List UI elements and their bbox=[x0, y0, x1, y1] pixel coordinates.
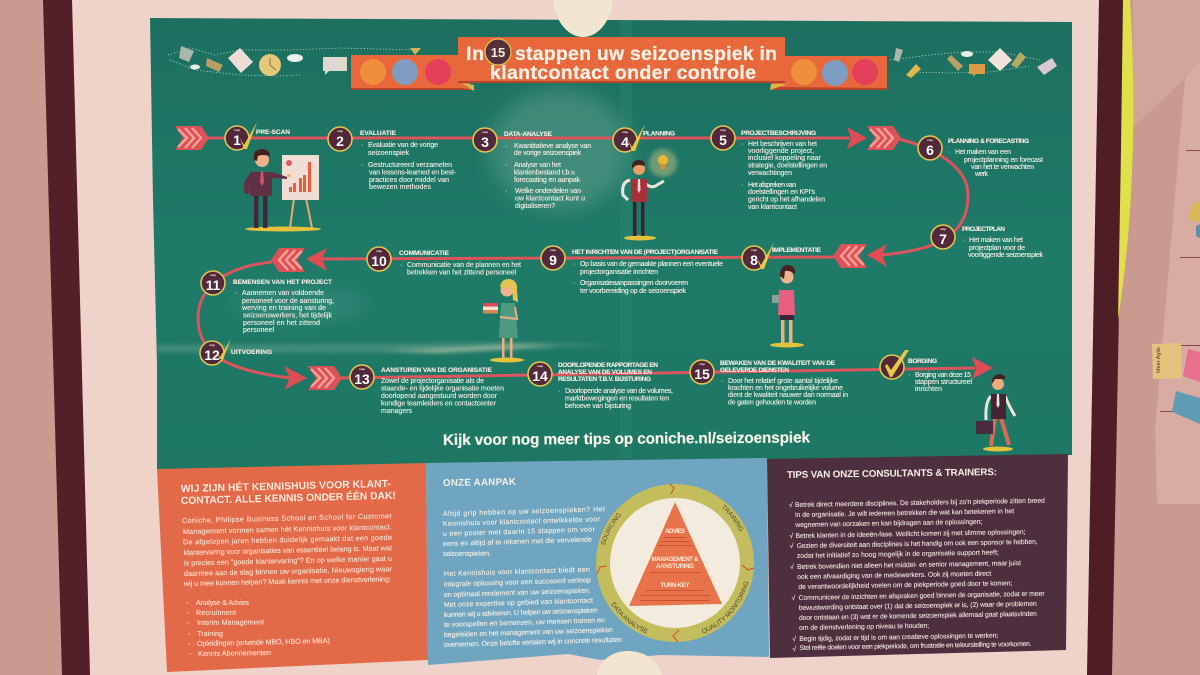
step 9: ter voorbereiding op de seizoenspiek bbox=[580, 288, 686, 295]
panel: orange kennishuis: Interim Management bbox=[197, 617, 264, 627]
panel: blue onze aanpak: Het Kennishuis voor klantcontact biedt een bbox=[444, 567, 590, 578]
step 2: · bbox=[361, 142, 363, 149]
title banner: 15 bbox=[491, 45, 505, 60]
diagram: ring with pyramid: DATA ANALYSE bbox=[611, 602, 648, 634]
step 13: Zowel de projectorganisatie als de bbox=[381, 378, 484, 385]
illustration: blonde woman with books bbox=[483, 279, 524, 362]
step 2: practices door middel van bbox=[369, 177, 449, 184]
panel: orange kennishuis: WIJ ZIJN HÉT KENNISHUIS VOOR KLANT- bbox=[181, 477, 392, 495]
illustration: man walking with briefcase bbox=[976, 374, 1015, 452]
step 10: · bbox=[400, 262, 402, 269]
step 12: 12 bbox=[204, 347, 220, 363]
step 15: BEWAKEN VAN DE KWALITEIT VAN DE bbox=[720, 360, 836, 367]
panel: orange kennishuis: Opleidingen (erkende MBO, HBO en MBA) bbox=[197, 636, 330, 648]
step: borging: Borging van deze 15 bbox=[915, 372, 971, 379]
step 13: stap bbox=[359, 367, 365, 371]
step 15: dient de kwaliteit nauwer dan normaal in bbox=[728, 392, 848, 399]
step 11: personeel bbox=[243, 327, 274, 334]
step 4: PLANNING bbox=[643, 130, 675, 138]
step 5: PROJECTBESCHRIJVING bbox=[741, 130, 816, 137]
panel: orange kennishuis bbox=[157, 463, 428, 672]
step 15: krachten en het ongebruikelijke volume bbox=[728, 385, 843, 392]
panel: orange kennishuis: - bbox=[187, 608, 190, 617]
step 13: 13 bbox=[354, 371, 370, 387]
step 11: personeel voor de aansturing, bbox=[242, 298, 334, 305]
panel: orange kennishuis: Coniche, Philipse Business School en School for Customer bbox=[182, 511, 393, 525]
step 14: behoeve van bijsturing bbox=[565, 403, 631, 410]
step 5: verwachtingen bbox=[748, 170, 792, 177]
diagram: ring with pyramid bbox=[596, 482, 754, 642]
panel: orange kennishuis: Recruitment bbox=[196, 608, 236, 617]
title banner: In bbox=[466, 43, 484, 65]
title banner: stappen uw seizoenspiek in bbox=[515, 43, 777, 65]
panel: blue onze aanpak: seizoenspieken. bbox=[443, 551, 491, 558]
step 15: Door het relatief grote aantal tijdelijke bbox=[728, 378, 838, 385]
panel: blue onze aanpak: u een poster met daarin 15 stappen om voor bbox=[443, 526, 596, 538]
step 6: werk bbox=[974, 171, 988, 178]
step 3: DATA-ANALYSE bbox=[504, 131, 553, 138]
panel: blue onze aanpak: en optimaal rendement van uw seizoenspieken. bbox=[444, 588, 591, 599]
step 5: stap bbox=[720, 128, 726, 132]
step 12: UITVOERING bbox=[231, 349, 272, 356]
step: borging bbox=[880, 350, 972, 393]
sticky note: yellow bbox=[1152, 343, 1182, 379]
panel: blue onze aanpak: Kennishuis voor klantcontact ontwikkelde voor bbox=[443, 516, 601, 528]
frame: right bar bbox=[1087, 0, 1125, 675]
step 6: van het te verwachten bbox=[971, 164, 1034, 171]
step 13: doorlopend aangestuurd worden door bbox=[381, 393, 498, 400]
illustration: man with light bulb bbox=[623, 149, 677, 240]
step 10: betrekken van het zittend personeel bbox=[407, 270, 516, 276]
step 7: · bbox=[962, 237, 964, 244]
process path: line row 3 bbox=[284, 357, 993, 390]
panel: purple tips: Begin tijdig, zodat er tijd is om aan creatieve oplossingen te werken; bbox=[799, 632, 998, 643]
title banner bbox=[458, 37, 785, 84]
panel: orange kennishuis: Management vormen samen hét Kennishuis voor klantcontact. bbox=[183, 522, 392, 536]
panel: orange kennishuis: - bbox=[188, 639, 191, 648]
step 7: stap bbox=[940, 227, 946, 231]
step 2: 2 bbox=[336, 133, 344, 149]
panel: orange kennishuis: is precies een “goede klantervaring”? En op welke manier gaat u bbox=[184, 554, 392, 567]
magnet bottom bbox=[597, 651, 662, 675]
step 9: projectorganisatie inrichten bbox=[580, 269, 658, 276]
panel: purple tips: √ bbox=[789, 532, 794, 540]
step 13: kundige teamleiders en contactcenter bbox=[381, 400, 497, 408]
step 11: Aannemen van voldoende bbox=[242, 290, 324, 297]
magnet top bbox=[553, 0, 613, 37]
panel: purple tips: in de organisatie. Je wilt iedereen betrekken die wat kan betekenen in het bbox=[795, 508, 1014, 519]
step 9: Organisatieaanpassingen doorvoeren bbox=[580, 280, 688, 287]
panel: blue onze aanpak bbox=[426, 458, 769, 665]
process path: right curve bbox=[882, 139, 968, 255]
step 14 bbox=[528, 362, 673, 410]
illustration: woman with tablet bbox=[770, 265, 804, 348]
step 3: · bbox=[505, 143, 507, 150]
panel: orange kennishuis: wij u mee kunnen helpen? Maak kennis met onze dienstverlening: bbox=[183, 574, 391, 588]
step 2: seizoenspiek bbox=[368, 150, 410, 157]
step 15: de gaten gehouden te worden bbox=[728, 400, 816, 406]
panel: blue onze aanpak: integrale oplossing voor een succesvol verloop bbox=[444, 577, 591, 588]
process path: line row 1 bbox=[175, 126, 901, 150]
step 9: · bbox=[573, 261, 575, 268]
step 3: forecasting en aanpak bbox=[514, 177, 580, 184]
step 6: projectplanning en forecast bbox=[964, 157, 1043, 164]
panel: purple tips: Stel reële doelen voor een piekperiode, om frustratie en teleurstelling te voorkomen. bbox=[799, 641, 1032, 652]
step 9: HET INRICHTEN VAN DE (PROJECT)ORGANISATIE bbox=[572, 249, 719, 256]
step 14: stap bbox=[537, 364, 543, 368]
step 2: · bbox=[361, 162, 363, 169]
step 15 bbox=[690, 360, 848, 406]
panel: purple tips: zodat het initiatief zo hoog mogelijk in de organisatie support heeft; bbox=[797, 549, 999, 560]
frame: left bar bbox=[43, 0, 90, 675]
step 9: stap bbox=[550, 248, 556, 252]
step 2: EVALUATIE bbox=[360, 130, 397, 137]
panel: purple tips: √ bbox=[789, 501, 793, 509]
step 3 bbox=[473, 128, 591, 210]
panel: blue onze aanpak: eens en altijd af te rekenen met die vervelende bbox=[443, 537, 592, 548]
panel: purple tips: √ bbox=[792, 635, 796, 643]
step 8 bbox=[742, 242, 822, 270]
step 9 bbox=[541, 246, 723, 295]
step 4: 4 bbox=[621, 134, 629, 150]
step 14: marktbewegingen en resultaten ten bbox=[565, 396, 669, 402]
panel: purple tips: √ bbox=[790, 563, 794, 571]
panel: purple tips: bewustwording ontstaat over (1) dat de seizoenspiek er is, (2) waar de problemen bbox=[799, 601, 1037, 612]
step 10: 10 bbox=[371, 253, 387, 269]
step 5: · bbox=[741, 182, 743, 189]
decorative top icons: left cluster bbox=[168, 46, 421, 76]
step 11 bbox=[201, 271, 334, 334]
process path: left curve bbox=[198, 262, 290, 378]
right wall with paper and sticky notes bbox=[1133, 0, 1200, 504]
panel: purple tips: Betrek direct meerdere disciplines. De stakeholders bij zo'n piekperiode zitten breed bbox=[795, 498, 1045, 509]
step 2: stap bbox=[337, 129, 343, 133]
step 10: COMMUNICATIE bbox=[399, 250, 450, 257]
step 13: AANSTUREN VAN DE ORGANISATIE bbox=[381, 367, 493, 374]
step 9: Op basis van de gemaakte plannen een eventuele bbox=[580, 261, 723, 268]
step 15: 15 bbox=[694, 366, 710, 382]
step 10 bbox=[367, 247, 521, 276]
step 12 bbox=[200, 339, 272, 365]
panel: orange kennishuis: De afgelopen jaren hebben duidelijk gemaakt dat een goede bbox=[183, 533, 392, 546]
step 15: · bbox=[721, 378, 723, 385]
process path: line row 2 bbox=[271, 244, 887, 272]
step 11: 11 bbox=[206, 277, 221, 293]
step 3: Kwantitatieve analyse van bbox=[514, 143, 591, 150]
step 7: Het maken van het bbox=[969, 237, 1023, 244]
step 7: PROJECTPLAN bbox=[962, 226, 1005, 233]
panel: blue onze aanpak: te voorspellen en bemensen, uw mensen trainen en bbox=[444, 617, 605, 629]
panel: orange kennishuis: daarmee aan de slag binnen uw organisatie. Nieuwsgierig waar bbox=[184, 564, 393, 578]
step 2: Evaluatie van de vorige bbox=[368, 142, 438, 149]
step 5: voorliggende project, bbox=[748, 148, 814, 155]
step 5: 5 bbox=[719, 132, 727, 148]
step 14: DOORLOPENDE RAPPORTAGE EN bbox=[558, 362, 658, 369]
panel: green poster background bbox=[150, 18, 1072, 470]
diagram: ring with pyramid: SOURCING bbox=[601, 513, 620, 546]
step 6: · bbox=[948, 149, 950, 156]
panel: purple tips: ook een afvaardiging van de medewerkers. Ook zij moeten direct bbox=[797, 571, 991, 581]
illustration: man presenting at flipchart bbox=[244, 149, 321, 232]
step 3: digitaliseren? bbox=[515, 203, 555, 210]
step 5: inclusief koppeling naar bbox=[748, 155, 822, 162]
yellow folder edge bbox=[1118, 0, 1133, 320]
step 3: · bbox=[505, 162, 507, 169]
step 5: Het beschrijven van het bbox=[748, 141, 817, 148]
step 3: Welke onderdelen van bbox=[515, 188, 581, 195]
panel: purple tips: wegnemen van oorzaken en kan bijdragen aan de oplossingen; bbox=[794, 519, 982, 529]
step 13 bbox=[350, 365, 504, 415]
diagram: ring with pyramid: QUALITY MONITORING bbox=[702, 581, 748, 634]
step 15: stap bbox=[699, 362, 705, 366]
step 14: RESULTATEN T.B.V. BIJSTURING bbox=[558, 376, 651, 383]
step 11: werving en training van de bbox=[241, 305, 326, 312]
step 3: stap bbox=[482, 130, 488, 134]
pyramid: TURN-KEY bbox=[660, 582, 690, 589]
step 11: BEMENSEN VAN HET PROJECT bbox=[233, 279, 332, 286]
step 3: klantenbestand t.b.v. bbox=[514, 170, 576, 176]
step 7 bbox=[931, 225, 1044, 259]
step 13: managers bbox=[381, 408, 412, 415]
step 2: van lessons-learned en best- bbox=[369, 170, 457, 176]
step 7: voorliggende seizoenspiek bbox=[968, 252, 1044, 259]
step 4: stap bbox=[622, 130, 628, 134]
panel: purple tips: Betrek bovendien niet alleen het middel- en senior management, maar juist bbox=[797, 560, 1021, 571]
step 5: gericht op het afhandelen bbox=[748, 196, 825, 204]
diagram: ring with pyramid: TRAINING bbox=[722, 504, 744, 532]
step 10: stap bbox=[376, 249, 382, 253]
step 1: 1 bbox=[233, 132, 241, 148]
step 7: 7 bbox=[939, 231, 947, 247]
panel: purple tips bbox=[767, 454, 1068, 658]
step 14: Doorlopende analyse van de volumes, bbox=[565, 388, 673, 395]
title ribbon: right logos bbox=[770, 56, 887, 90]
step 5 bbox=[711, 126, 827, 211]
panel: blue onze aanpak: kunnen wij u adviseren. U helpen uw seizoenspieken bbox=[444, 607, 598, 619]
step: borging: · bbox=[908, 372, 910, 379]
step 6: PLANNING & FORECASTING bbox=[948, 138, 1029, 145]
panel: blue onze aanpak: Altijd grip hebben op uw seizoenspieken? Het bbox=[443, 506, 605, 518]
step 2: Gestructureerd verzamelen bbox=[368, 162, 452, 169]
step 9: · bbox=[573, 280, 575, 287]
step 6: Het maken van een bbox=[955, 149, 1011, 156]
panel: purple tips: de verantwoordelijkheid voelen om de piekperiode goed door te komen; bbox=[798, 580, 1013, 591]
step 5: · bbox=[741, 141, 743, 148]
panel: purple tips: Gezien de diversiteit aan disciplines is het handig om ook een sponsor te hebben, bbox=[797, 539, 1038, 550]
step 5: strategie, doelstellingen en bbox=[748, 162, 827, 170]
panel: purple tips: om de dienstverlening op niveau te houden; bbox=[799, 623, 929, 632]
step 8: IMPLEMENTATIE bbox=[772, 247, 822, 254]
step 1: PRE-SCAN bbox=[256, 129, 290, 136]
panel: purple tips: TIPS VAN ONZE CONSULTANTS & TRAINERS: bbox=[787, 467, 997, 481]
step 10: Communicatie van de plannen en het bbox=[407, 262, 521, 269]
panel: orange kennishuis: Training bbox=[197, 629, 223, 638]
panel: orange kennishuis: - bbox=[189, 649, 192, 658]
step 14: ANALYSE VAN DE VOLUMES EN bbox=[558, 369, 652, 376]
step 14: 14 bbox=[532, 368, 548, 384]
step 3: 3 bbox=[481, 134, 489, 150]
pyramid: ADVIES bbox=[665, 528, 685, 535]
panel: blue onze aanpak: begeleiden en het management van uw seizoenspieken bbox=[444, 627, 613, 639]
title banner: klantcontact onder controle bbox=[490, 62, 756, 84]
step 5: Het afspreken van bbox=[748, 182, 796, 189]
step 6: stap bbox=[927, 138, 933, 142]
step 7: projectplan voor de bbox=[969, 245, 1025, 252]
pyramid bbox=[629, 502, 722, 606]
step 1: stap bbox=[234, 128, 240, 132]
step: borging: BORGING bbox=[908, 358, 937, 365]
step 12: stap bbox=[209, 343, 215, 347]
step 15: GELEVERDE DIENSTEN bbox=[720, 367, 789, 374]
step 9: 9 bbox=[549, 252, 557, 268]
pyramid: AANSTURING bbox=[656, 563, 694, 570]
step 3: uw klantcontact kunt u bbox=[515, 196, 585, 202]
step 1 bbox=[225, 122, 290, 150]
panel: orange kennishuis: CONTACT. ALLE KENNIS ONDER ÉÉN DAK! bbox=[181, 489, 396, 507]
step 11: seizoenswerkers, het tijdelijk bbox=[243, 312, 332, 320]
panel: orange kennishuis: - bbox=[186, 598, 189, 607]
panel: orange kennishuis: - bbox=[188, 629, 191, 638]
sticky note: yellow: Meer Agile bbox=[1156, 347, 1162, 373]
panel: purple tips: Communiceer de inzichten en afspraken goed binnen de organisatie, zodat er meer bbox=[799, 591, 1045, 602]
pyramid: MANAGEMENT & bbox=[652, 556, 699, 563]
step 5: doelstellingen en KPI's bbox=[748, 189, 816, 196]
step 14: · bbox=[558, 388, 560, 395]
panel: purple tips: √ bbox=[792, 594, 796, 602]
step 11: personeel en het zittend bbox=[243, 320, 320, 327]
step: borging: inrichten bbox=[915, 386, 942, 393]
step 5: van klantcontact bbox=[748, 204, 797, 211]
step 8: stap bbox=[751, 248, 757, 252]
step: borging: stappen structureel bbox=[915, 379, 972, 386]
panel: orange kennishuis: Analyse & Advies bbox=[196, 598, 249, 607]
panel: purple tips: √ bbox=[792, 645, 797, 653]
panel: purple tips: √ bbox=[790, 542, 794, 550]
step 3: de vorige seizoenspiek bbox=[514, 150, 582, 157]
step 8: 8 bbox=[750, 252, 758, 268]
step 11: stap bbox=[210, 273, 216, 277]
panel: purple tips: Betrek klanten in de ideeën-fase. Wellicht komen zij met slimme oplossingen; bbox=[795, 529, 1026, 540]
panel: blue onze aanpak: ONZE AANPAK bbox=[443, 477, 516, 489]
panel: blue onze aanpak: overnemen. Onze belofte vertalen wij in concrete resultaten bbox=[444, 637, 622, 649]
panel: purple tips: door ontstaan en (3) wat er de komende seizoenspiek allemaal gaat plaatsvinden bbox=[799, 611, 1037, 622]
step 6: 6 bbox=[926, 142, 934, 158]
title ribbon: left logos bbox=[351, 55, 475, 91]
step 2 bbox=[328, 127, 457, 191]
panel: orange kennishuis: klantervaring voor organisaties van essentieel belang is. Maar wat bbox=[184, 543, 392, 557]
step 2: bewezen methodes bbox=[369, 184, 432, 191]
step 13: staande- en tijdelijke organisatie moeten bbox=[381, 386, 504, 392]
step 11: · bbox=[235, 290, 237, 297]
call to action: website: Kijk voor nog meer tips op coniche.nl/seizoenspiek bbox=[443, 429, 811, 449]
step 4 bbox=[613, 124, 675, 152]
decorative top icons: right cluster bbox=[890, 48, 1057, 78]
panel: orange kennishuis: Kennis Abonnementen bbox=[198, 648, 271, 658]
step 6 bbox=[918, 136, 1043, 178]
panel: orange kennishuis: - bbox=[187, 618, 190, 627]
panel: blue onze aanpak: Met onze expertise op gebied van klantcontact bbox=[444, 598, 593, 609]
step 3: Analyse van het bbox=[514, 162, 561, 169]
step 3: · bbox=[505, 188, 507, 195]
